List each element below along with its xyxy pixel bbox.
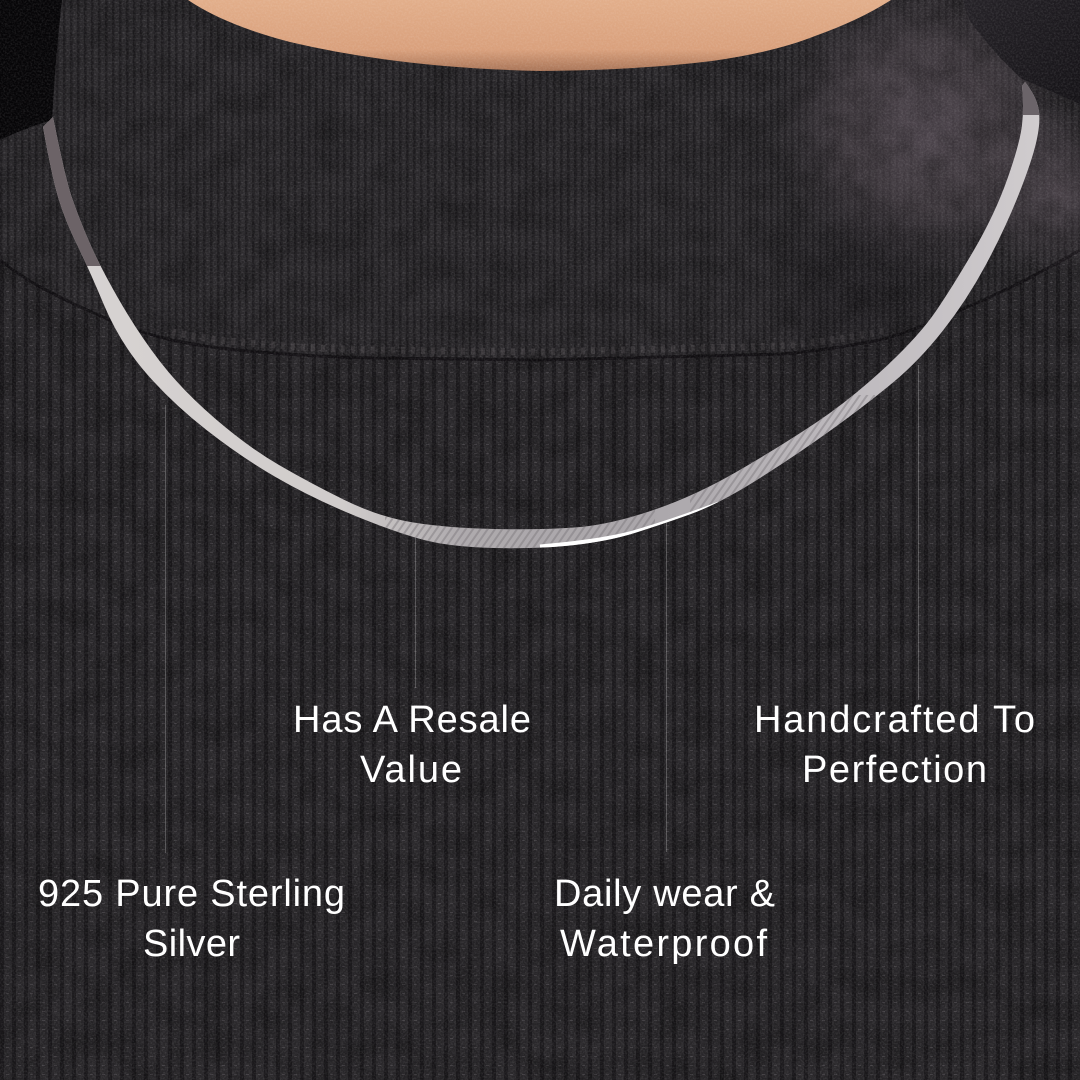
label: 925 Pure Sterling Silver: 925 Pure Sterling — [38, 873, 345, 915]
label: Daily wear & Waterproof — [554, 873, 775, 965]
herringbone texture bottom — [385, 510, 655, 548]
label: 925 Pure Sterling Silver: Silver — [143, 923, 240, 965]
bright highlight along lower curve — [540, 504, 719, 547]
collar stitched hem band — [172, 331, 884, 352]
label: Has A Resale Value — [293, 699, 531, 791]
herringbone texture right — [690, 395, 875, 520]
right backdrop corner — [950, 0, 1080, 120]
label: Daily wear & Waterproof: Waterproof — [560, 923, 767, 965]
skin of neck — [188, 0, 891, 71]
collar fold shadow line — [0, 250, 1080, 360]
necklace dim left end — [43, 117, 100, 266]
label: Has A Resale Value: Value — [360, 749, 462, 791]
herringbone silver necklace — [43, 82, 1040, 548]
garment: turtleneck collar — [0, 0, 1080, 360]
necklace dim right end — [1022, 82, 1040, 115]
label: Has A Resale Value: Has A Resale — [293, 699, 531, 741]
label: Handcrafted To Perfection: Handcrafted To — [754, 699, 1035, 741]
label: Handcrafted To Perfection: Perfection — [802, 749, 987, 791]
callout lines — [166, 365, 918, 853]
label: 925 Pure Sterling Silver — [38, 873, 345, 965]
label: Handcrafted To Perfection — [754, 699, 1035, 791]
label: Daily wear & Waterproof: Daily wear & — [554, 873, 775, 915]
